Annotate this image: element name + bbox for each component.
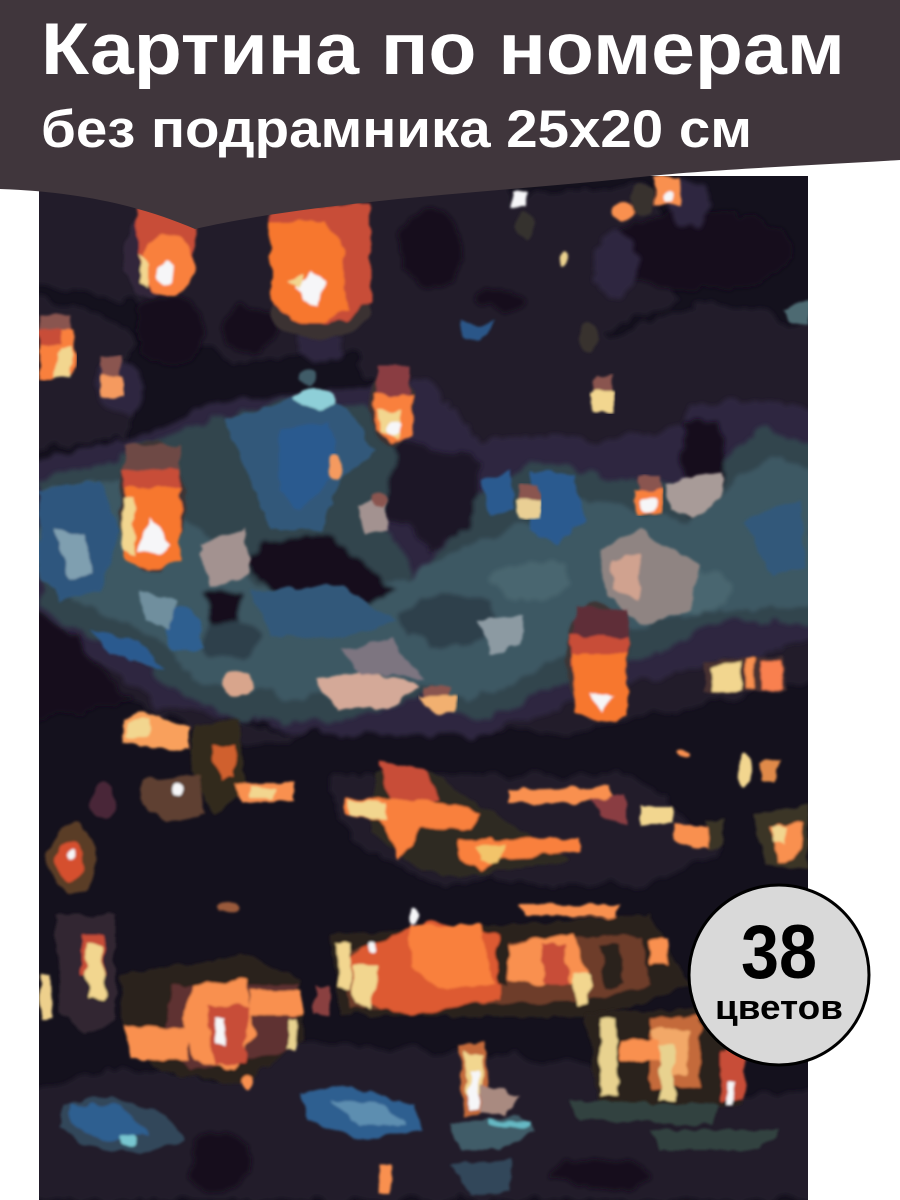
- reflections: upper left lights: [91, 712, 296, 822]
- lanterns: small top right: [300, 176, 808, 386]
- water: lower lights and blue reflections: [60, 1040, 780, 1195]
- reflections: central lights: [345, 750, 725, 878]
- subtitle: без подрамника 25х20 см: [41, 100, 752, 159]
- lantern: large at left: [119, 439, 185, 571]
- lantern: top left: [124, 205, 195, 297]
- badge number: 38: [741, 910, 817, 995]
- sky texture: dark gaps in the purple: [135, 210, 790, 1190]
- sky texture: dark purple patches: [20, 170, 820, 1200]
- lantern: small in blue cloud: [328, 456, 387, 507]
- lantern: small at left: [100, 357, 124, 398]
- title: Картина по номерам: [41, 9, 845, 90]
- left lamps: [40, 825, 115, 1035]
- lantern: small right of centre: [590, 375, 614, 412]
- lantern: left edge: [39, 315, 75, 378]
- lower right building lights: [585, 1008, 745, 1108]
- lantern: large lower right: [566, 602, 630, 724]
- clouds: blue patches: [39, 387, 807, 670]
- reflections: right lights: [705, 655, 807, 870]
- lantern: low cloud small: [420, 685, 456, 716]
- badge label: цветов: [715, 989, 843, 1027]
- sky texture: lighter purple halos: [30, 181, 820, 735]
- lantern: right cloud: [632, 476, 662, 514]
- lower left building lights: [120, 903, 330, 1091]
- lantern: centre small: [370, 365, 414, 445]
- clouds: warm beige patches: [200, 472, 725, 712]
- lantern: mid cloud: [516, 485, 540, 518]
- central building lights: [330, 905, 690, 1018]
- clouds: teal mass: [30, 395, 815, 722]
- painting: night sky with lanterns: [20, 170, 820, 1200]
- badge: number of colours: [689, 885, 869, 1065]
- lantern: large top centre: [270, 205, 370, 338]
- header banner: [0, 0, 900, 229]
